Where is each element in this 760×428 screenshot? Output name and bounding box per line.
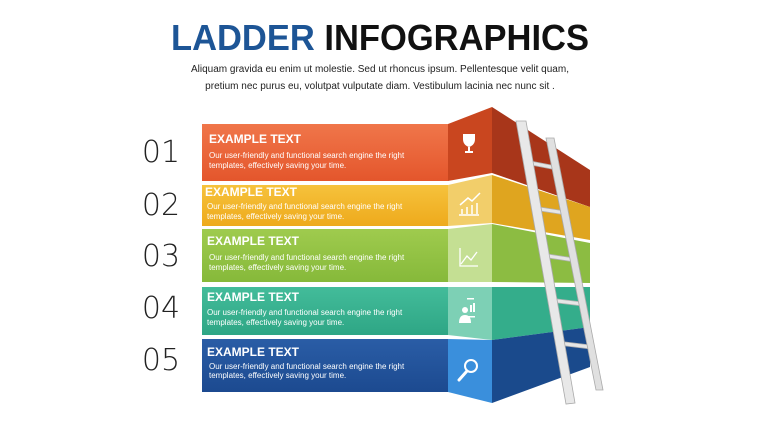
- step 3 green: EXAMPLE TEXT: [207, 234, 300, 248]
- step 4 teal: [202, 287, 590, 340]
- step 2 yellow: EXAMPLE TEXT: [205, 185, 298, 199]
- numbers: 01: [142, 135, 180, 170]
- icon: magnifier: [459, 360, 477, 380]
- step 1 orange: templates, effectively saving your time.: [209, 161, 346, 170]
- step 4 teal: templates, effectively saving your time.: [207, 318, 344, 327]
- numbers: 02: [142, 188, 180, 223]
- step 2 yellow: templates, effectively saving your time.: [207, 212, 344, 221]
- step 5 blue: EXAMPLE TEXT: [207, 345, 300, 359]
- numbers: 03: [142, 239, 180, 274]
- step 2 yellow: Our user-friendly and functional search engine the right: [207, 202, 403, 211]
- step 1 orange: [202, 107, 590, 207]
- step 1 orange: Our user-friendly and functional search engine the right: [209, 151, 405, 160]
- subtitle: [191, 64, 569, 92]
- step 3 green: Our user-friendly and functional search engine the right: [209, 253, 405, 262]
- step 4 teal: EXAMPLE TEXT: [207, 290, 300, 304]
- step 4 teal: Our user-friendly and functional search engine the right: [207, 308, 403, 317]
- step 5 blue: templates, effectively saving your time.: [209, 371, 346, 380]
- numbers: 04: [142, 291, 180, 326]
- step 5 blue: [202, 327, 590, 403]
- step 5 blue: Our user-friendly and functional search engine the right: [209, 362, 405, 371]
- numbers: [142, 135, 180, 378]
- numbers: 05: [142, 343, 180, 378]
- icon: presenter: [459, 298, 475, 323]
- title: LADDER INFOGRAPHICS: [171, 17, 589, 58]
- icon: trophy: [463, 134, 475, 153]
- step 2 yellow: [202, 175, 590, 240]
- icon: growth chart: [459, 193, 480, 215]
- step 1 orange: EXAMPLE TEXT: [209, 132, 302, 146]
- icon: line chart: [460, 248, 478, 266]
- subtitle: Aliquam gravida eu enim ut molestie. Sed ut rhoncus ipsum. Pellentesque velit quam,: [191, 64, 569, 75]
- subtitle: pretium nec purus eu, volutpat vulputate diam. Vestibulum lacinia nec nunc sit .: [205, 81, 555, 92]
- ladder: [516, 121, 603, 404]
- step 3 green: [202, 224, 590, 283]
- step 3 green: templates, effectively saving your time.: [209, 263, 346, 272]
